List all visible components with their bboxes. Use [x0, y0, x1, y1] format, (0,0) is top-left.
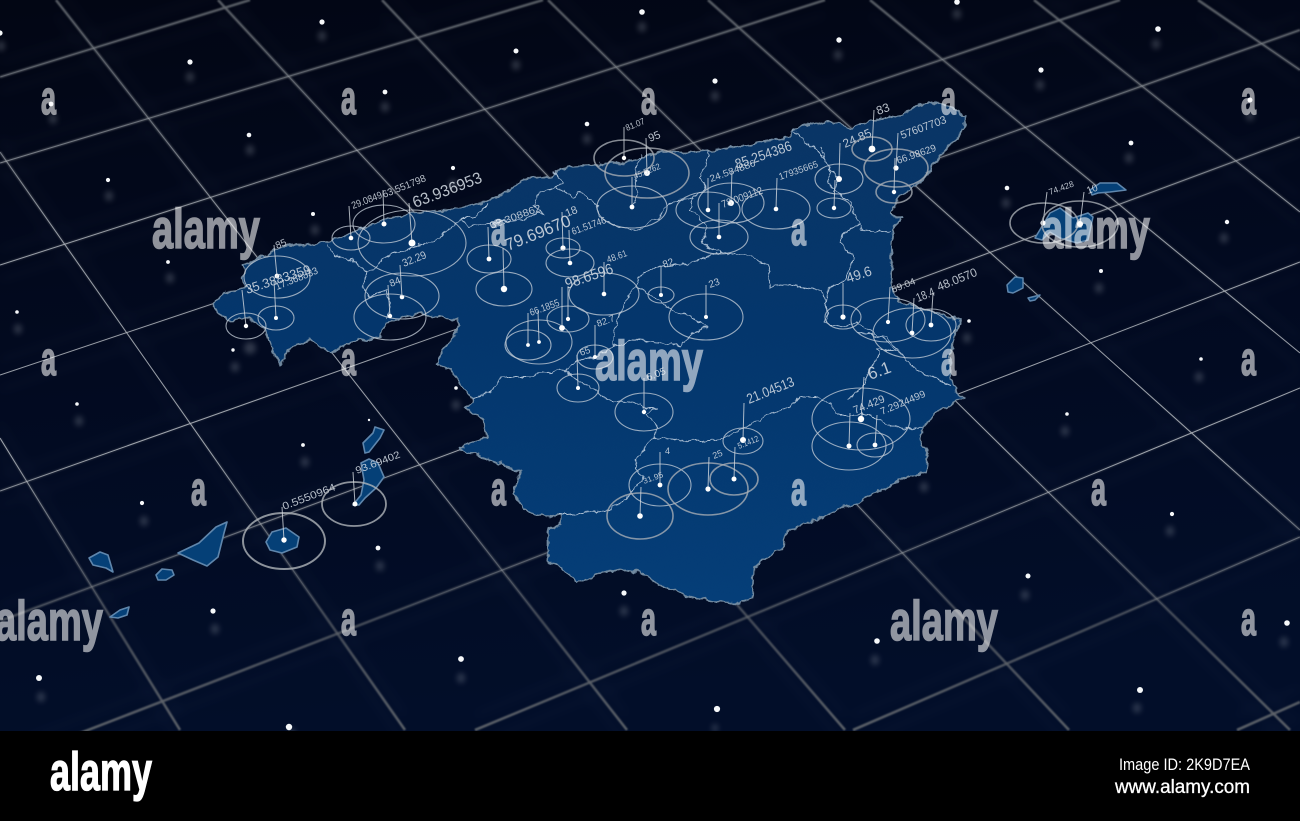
watermarks: a [641, 71, 656, 124]
marker 66.98629: 66.98629 [895, 143, 938, 167]
marker 24.584886: 24.584886 [708, 158, 757, 185]
marker 98.6596 and 48.61: 98.6596 [563, 260, 616, 293]
marker 0.5550964 [243, 481, 338, 569]
marker 62.308862: 62.308862 [488, 203, 543, 232]
marker 35.3883359 [226, 262, 313, 339]
marker 98.6596 and 48.61: 48.61 [605, 248, 629, 266]
watermarks: a [1241, 332, 1256, 385]
marker 81.07 [594, 116, 654, 176]
marker 66.1855: 66.1855 [528, 298, 562, 319]
marker 79.69670: 79.69670 [502, 211, 573, 255]
marker 82: 82 [661, 257, 676, 271]
marker 83 [852, 100, 892, 161]
marker 63.936953: 63.936953 [410, 170, 485, 212]
watermarks: a [1241, 71, 1256, 124]
Balearic Islands [1007, 183, 1126, 301]
watermarks: alamy [152, 197, 260, 260]
marker 17.368833: 17.368833 [274, 266, 320, 293]
marker 85.254386: 85.254386 [733, 137, 794, 172]
marker 17.368833 [258, 266, 320, 330]
marker 83: 83 [874, 100, 892, 118]
marker 79.69670 [476, 211, 573, 306]
marker 17935665 [742, 159, 820, 229]
marker 23 [669, 277, 743, 340]
marker 18.4: 18.4 [914, 285, 937, 305]
marker 49.6 [825, 263, 874, 329]
marker 62.308862 [467, 203, 543, 273]
mainland outline [213, 102, 965, 603]
marker 7.2924499: 7.2924499 [879, 389, 928, 418]
marker Andalusia east [710, 447, 758, 495]
marker 25 [668, 448, 748, 515]
marker 17935665: 17935665 [777, 159, 820, 183]
marker 84: 84 [388, 275, 403, 290]
marker 0.5550964: 0.5550964 [281, 481, 338, 513]
watermarks: a [491, 462, 506, 515]
Canary Islands [89, 427, 384, 618]
marker 57607703: 57607703 [899, 114, 948, 142]
watermarks: a [341, 332, 356, 385]
marker 18: 18 [564, 204, 579, 220]
label 32.29: 32.29 [401, 249, 428, 270]
marker 25: 25 [711, 448, 724, 461]
marker 49.6: 49.6 [844, 263, 874, 286]
marker 78.009112: 78.009112 [720, 185, 765, 211]
watermarks: a [641, 592, 656, 645]
watermarks: alamy [890, 589, 998, 652]
marker 23: 23 [707, 277, 722, 291]
marker 48.0570 [906, 265, 979, 341]
image id: Image ID: 2K9D7EA [1119, 755, 1251, 774]
marker 78.009112 [690, 185, 765, 254]
marker 69.04 [851, 276, 925, 342]
footer bar [0, 731, 1300, 821]
marker Madrid south [557, 355, 599, 402]
marker south Galicia [354, 285, 426, 340]
marker 81.07: 81.07 [624, 116, 646, 133]
marker 6.05: 6.05 [645, 366, 668, 384]
marker 10: 10 [1085, 183, 1100, 197]
watermarks: a [791, 202, 806, 255]
region borders [328, 128, 950, 515]
map of mainland Spain [213, 102, 965, 603]
marker 74.428: 74.428 [1047, 178, 1075, 197]
marker 21.04513: 21.04513 [744, 373, 797, 407]
watermarks: a [491, 202, 506, 255]
marker 4: 4 [665, 446, 670, 456]
marker 6.1 and 74.429: 74.429 [852, 393, 887, 417]
watermarks: a [41, 332, 56, 385]
marker 4 [629, 446, 691, 506]
marker 21.04513: 5.1412 [736, 433, 760, 451]
watermarks: a [941, 332, 956, 385]
watermarks: a [191, 462, 206, 515]
marker 29.0849: 29.0849 [350, 190, 384, 212]
watermarks: a [41, 71, 56, 124]
marker 93.69402: 93.69402 [354, 450, 402, 477]
marker 10 [1042, 183, 1118, 247]
marker 6.05 [615, 366, 673, 431]
marker 24.85: 24.85 [841, 126, 874, 151]
marker 65 and 82.7: 82.7 [595, 313, 616, 330]
marker 82 [648, 257, 676, 303]
marker central b [559, 287, 565, 331]
watermarks: a [791, 462, 806, 515]
watermarks: alamy [595, 329, 703, 392]
marker 6.1 and 74.429: 6.1 [865, 358, 894, 384]
marker 29.0849 [332, 190, 384, 250]
watermarks [0, 71, 1256, 652]
marker 65 and 82.7: 65 [578, 345, 592, 359]
marker Basque ring [597, 177, 667, 228]
watermarks: a [941, 71, 956, 124]
data markers [226, 100, 1118, 569]
watermarks: a [1091, 462, 1106, 515]
marker 21.04513 [723, 373, 797, 454]
marker 98.6596 and 48.61 [563, 248, 639, 315]
marker 95 [605, 129, 689, 198]
watermarks: a [341, 71, 356, 124]
watermarks: a [1241, 592, 1256, 645]
marker 35.3883359: 35.3883359 [243, 262, 313, 297]
marker 66.1855 [506, 298, 572, 364]
watermarks: alamy [1042, 197, 1150, 260]
marker 24.85 [815, 126, 874, 194]
marker 61.51746 [546, 215, 608, 277]
marker 7.2924499 [857, 389, 928, 457]
marker Catalonia Pyrenees [817, 180, 851, 218]
marker 84 [365, 265, 439, 319]
marker 18 [546, 204, 580, 258]
marker 95: 45.5262 [632, 161, 662, 181]
marker 6.1 and 74.429 [812, 358, 910, 450]
watermarks: a [341, 592, 356, 645]
marker Andalusia west [607, 487, 673, 539]
marker 63.936953 [358, 170, 485, 276]
marker 69.04: 69.04 [890, 276, 917, 296]
marker 85.254386 [698, 137, 794, 223]
marker 63.551798 [353, 173, 428, 243]
marker 48.0570: 48.0570 [935, 265, 979, 294]
marker 24.584886 [676, 158, 757, 228]
marker Murcia left [812, 413, 886, 470]
marker 57607703 [864, 114, 948, 187]
marker 4: 31.95 [642, 470, 665, 486]
marker central a [547, 287, 589, 332]
marker 93.69402 [322, 450, 402, 526]
marker 85: 85 [274, 237, 289, 252]
marker 85 [244, 237, 310, 298]
marker 95: 95 [647, 129, 662, 145]
marker 61.51746: 61.51746 [570, 215, 608, 238]
marker 66.1855 left [505, 313, 551, 360]
marker 74.428 [1010, 178, 1078, 243]
footer logo: alamy [50, 742, 152, 802]
marker 18.4 [873, 285, 951, 358]
marker 66.98629 [876, 143, 938, 203]
marker 63.551798: 63.551798 [381, 173, 428, 201]
marker 65 and 82.7 [577, 313, 616, 369]
website: www.alamy.com [1114, 777, 1250, 798]
